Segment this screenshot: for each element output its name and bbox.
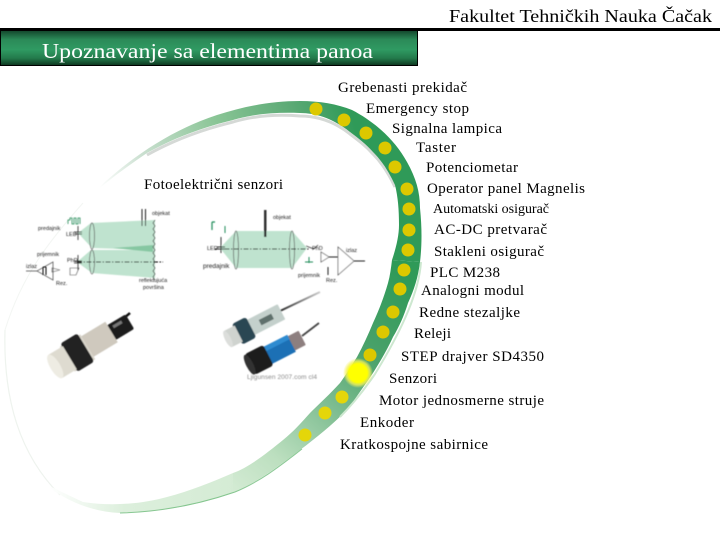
list of panel elements: Operator panel Magnelis [427,181,585,197]
list of panel elements: Kratkospojne sabirnice [340,437,488,453]
list of panel elements: Releji [414,326,451,342]
timeline markers [298,102,416,442]
diagram: reflective photoelectric sensor: LED [66,232,77,238]
photo: blue sensor [241,323,319,376]
diagram: through-beam photoelectric sensor: objekat [273,215,291,221]
title banner: Upoznavanje sa elementima panoa [42,39,374,63]
list of panel elements: Senzori [389,371,437,387]
list of panel elements: Redne stezaljke [419,305,520,321]
photo: capacitive sensor [42,307,138,383]
diagram: reflective photoelectric sensor: objekat [152,211,170,217]
diagram: through-beam photoelectric sensor: izlaz [346,248,357,254]
list of panel elements: Enkoder [360,415,414,431]
heading: photoelectric sensors: Fotoelektrični senzori [144,177,283,193]
diagram: reflective photoelectric sensor [26,209,170,291]
diagram: reflective photoelectric sensor: reflektujuća [139,278,168,284]
list of panel elements: Grebenasti prekidač [338,80,467,96]
list of panel elements: STEP drajver SD4350 [401,349,544,365]
diagram: reflective photoelectric sensor: prijemnik [37,252,59,258]
photo: grey sensor [220,292,320,351]
diagram: reflective photoelectric sensor: PhD [67,258,78,264]
diagram: through-beam photoelectric sensor [203,210,365,284]
diagram: through-beam photoelectric sensor: PhD [312,246,323,252]
list of panel elements: AC-DC pretvarač [434,222,547,238]
list of panel elements: Taster [416,140,456,156]
curved timeline band [5,101,422,513]
diagram: reflective photoelectric sensor: predajnik [38,226,61,232]
active marker: Senzori [343,358,373,388]
list of panel elements: PLC M238 [430,265,500,281]
photo watermark: Ljigunsen 2007.com cl4 [247,374,317,381]
list of panel elements: Automatski osigurač [433,202,549,217]
diagram: through-beam photoelectric sensor: prijemnik [298,273,320,279]
list of panel elements: Stakleni osigurač [434,244,544,260]
diagram: through-beam photoelectric sensor: Rez. [326,278,338,284]
list of panel elements: Motor jednosmerne struje [379,393,544,409]
diagram: reflective photoelectric sensor: izlaz [26,264,37,270]
diagram: reflective photoelectric sensor: Rez. [56,281,68,287]
diagram: reflective photoelectric sensor: površina [143,285,165,291]
list of panel elements: Potenciometar [426,160,518,176]
list of panel elements: Signalna lampica [392,121,502,137]
list of panel elements: Emergency stop [366,101,469,117]
diagram: through-beam photoelectric sensor: LED [207,246,218,252]
top rule [0,28,720,31]
list of panel elements: Analogni modul [421,283,524,299]
diagram: through-beam photoelectric sensor: predajnik [203,263,230,270]
title banner [0,31,418,66]
header: faculty name: Fakultet Tehničkih Nauka Čačak [449,5,712,26]
list of panel elements [338,80,585,453]
